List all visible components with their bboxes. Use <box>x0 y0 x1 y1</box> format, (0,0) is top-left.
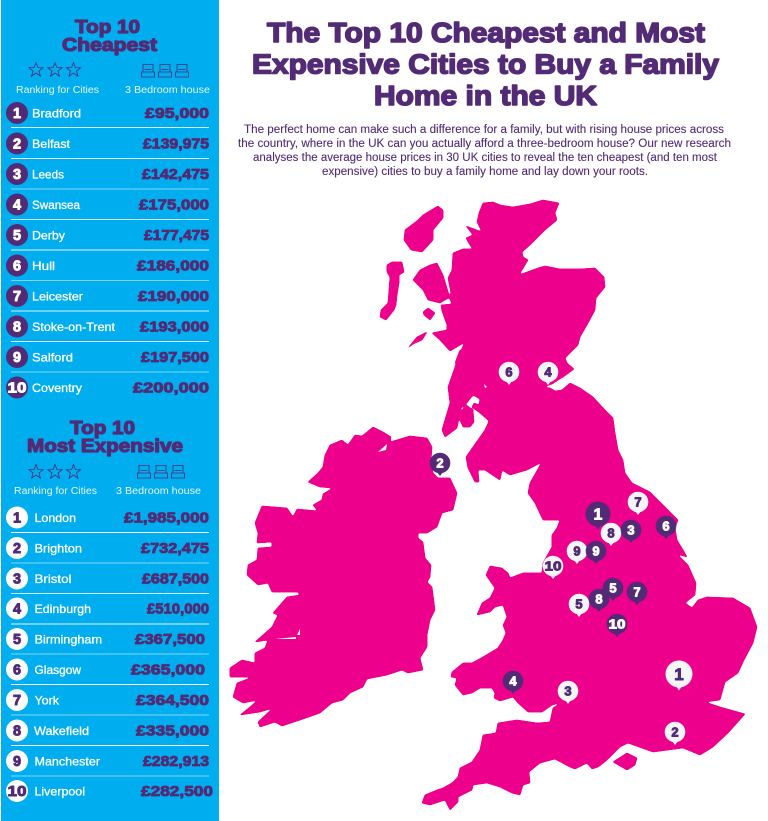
row: Glasgow: 6 <box>13 662 21 678</box>
pin: dark 5 Derby <box>603 578 623 601</box>
row: Leicester: Leicester <box>32 290 83 304</box>
pin: dark 4 Swansea: 4 <box>509 674 517 689</box>
row: Leicester <box>6 285 209 307</box>
row: Brighton: 2 <box>13 541 21 557</box>
column label: ranking for cities: Ranking for Cities <box>14 486 97 497</box>
row: Glasgow: Glasgow <box>34 663 81 677</box>
row: Leeds: £142,475 <box>142 167 209 183</box>
row: Edinburgh: Edinburgh <box>34 602 91 616</box>
row: York <box>6 689 209 711</box>
map land: Ireland <box>230 427 457 727</box>
pin: white 2 Brighton: 2 <box>671 725 679 740</box>
row: Edinburgh <box>6 598 209 620</box>
pin: white 8 Wakefield <box>601 523 621 546</box>
title: The Top 10 Cheapest and Most <box>267 17 705 48</box>
pin: white 4 Edinburgh: 4 <box>544 365 552 380</box>
row: Salford <box>6 346 209 368</box>
row: Bradford: £95,000 <box>145 106 209 122</box>
row: York: £364,500 <box>136 693 209 709</box>
pin: white 10 Liverpool <box>543 556 563 579</box>
panel: sidebar rankings <box>1 0 219 821</box>
row: Salford: 9 <box>13 350 21 366</box>
icon: three stars <box>29 62 81 76</box>
row: Belfast <box>6 132 209 154</box>
row: Birmingham: 5 <box>13 632 21 648</box>
intro text <box>238 124 731 178</box>
row: Coventry: £200,000 <box>133 380 209 396</box>
column label: 3 bedroom house: 3 Bedroom house <box>125 85 210 96</box>
pin: dark 9 Salford: 9 <box>592 544 600 559</box>
map detail: sea lochs <box>275 384 487 639</box>
row: Bradford <box>6 102 209 124</box>
row: Coventry: 10 <box>8 381 26 397</box>
row: Leeds <box>6 163 209 185</box>
title: Home in the UK <box>374 80 597 111</box>
row: Derby: Derby <box>32 229 65 243</box>
pin: dark 9 Salford <box>586 541 606 564</box>
pin: white 7 York: 7 <box>634 495 642 510</box>
row: Birmingham <box>6 628 205 650</box>
row: Hull <box>6 254 209 276</box>
pin: dark 4 Swansea <box>503 671 523 694</box>
row: Belfast: Belfast <box>32 137 71 151</box>
row: Hull: £186,000 <box>137 258 209 274</box>
row: Swansea: £175,000 <box>139 198 209 214</box>
row: Stoke-on-Trent: 8 <box>13 320 21 336</box>
pin: white 6 Glasgow <box>499 362 519 385</box>
icon: three beds <box>142 64 188 77</box>
heading: top 10 cheapest: Top 10 <box>75 17 140 37</box>
row: Belfast: £139,975 <box>143 136 209 152</box>
icon: three beds <box>138 466 184 478</box>
heading: top 10 cheapest <box>62 17 157 55</box>
row: Glasgow: £365,000 <box>131 662 205 678</box>
title: Expensive Cities to Buy a Family <box>252 48 719 80</box>
row: Coventry <box>6 376 209 398</box>
intro text: analyses the average house prices in 30 UK cities to reveal the ten cheapest (and ten most <box>253 152 718 164</box>
row: Bristol: £687,500 <box>142 572 209 588</box>
intro text: The perfect home can make such a difference for a family, but with rising house prices across <box>244 124 724 136</box>
row: Birmingham: £367,500 <box>135 632 205 648</box>
row: Liverpool: £282,500 <box>141 784 213 800</box>
row: Bradford: 1 <box>13 106 21 122</box>
title <box>252 17 719 111</box>
row: Swansea: 4 <box>13 198 21 214</box>
row: Hull: 6 <box>13 259 21 275</box>
heading: top 10 cheapest: Cheapest <box>62 35 157 55</box>
pin: white 5 Birmingham <box>569 594 589 617</box>
row: Stoke-on-Trent: £193,000 <box>140 320 209 336</box>
pin: dark 5 Derby: 5 <box>609 581 617 596</box>
row: Edinburgh: 4 <box>13 602 21 618</box>
row: Swansea: Swansea <box>32 198 80 212</box>
row: Swansea <box>6 194 209 216</box>
pin: dark 2 Belfast <box>430 453 450 476</box>
row: Wakefield: £335,000 <box>136 724 209 740</box>
pin: white 9 Manchester <box>567 541 587 564</box>
pin: dark 3 Leeds: 3 <box>627 523 635 538</box>
row: Wakefield <box>6 720 209 742</box>
row: Bristol <box>6 568 209 590</box>
intro text: the country, where in the UK can you actually afford a three-bedroom house? Our new research <box>238 138 731 150</box>
row: Birmingham: Birmingham <box>34 632 102 646</box>
row: Bristol: 3 <box>13 572 21 588</box>
row: London: £1,985,000 <box>124 510 209 526</box>
row: Bradford: Bradford <box>32 107 81 121</box>
pin: white 6 Glasgow: 6 <box>505 365 513 380</box>
row: Manchester: 9 <box>13 754 21 770</box>
row: Coventry: Coventry <box>32 381 82 395</box>
pin: dark 7 Leicester: 7 <box>633 585 641 600</box>
row: Leicester: 7 <box>13 289 21 305</box>
column label: ranking for cities: Ranking for Cities <box>16 85 99 96</box>
pin: white 4 Edinburgh <box>538 362 558 385</box>
pin: white 7 York <box>628 492 648 515</box>
intro text: expensive) cities to buy a family home and lay down your roots. <box>322 166 648 178</box>
row: Brighton: £732,475 <box>141 541 209 557</box>
pin: dark 6 Hull <box>656 516 676 539</box>
row: Salford: Salford <box>32 351 73 365</box>
pin: white 5 Birmingham: 5 <box>575 597 583 612</box>
row: Liverpool <box>6 780 213 802</box>
row: Derby: 5 <box>13 228 21 244</box>
row: Leicester: £190,000 <box>138 289 209 305</box>
row: London: 1 <box>13 510 21 526</box>
row: Brighton: Brighton <box>34 542 82 556</box>
pin: dark 10 Coventry: 10 <box>608 617 626 632</box>
pin: white 9 Manchester: 9 <box>573 544 581 559</box>
row: Manchester: £282,913 <box>143 754 209 770</box>
row: Liverpool: 10 <box>8 784 26 800</box>
pin: white 3 Bristol <box>558 681 578 704</box>
pin: dark 10 Coventry <box>607 614 627 637</box>
pin: dark 2 Belfast: 2 <box>436 456 444 471</box>
pin: white 3 Bristol: 3 <box>564 684 572 699</box>
row: Leeds: 3 <box>13 167 21 183</box>
row: Brighton <box>6 537 209 559</box>
pin: dark 3 Leeds <box>621 520 641 543</box>
row: York: 7 <box>13 693 21 709</box>
row: Leeds: Leeds <box>32 168 64 182</box>
dividers cheapest <box>11 128 209 372</box>
row: Derby: £177,475 <box>144 228 209 244</box>
pin: dark 8 Stoke-on-Trent: 8 <box>595 592 603 607</box>
row: Liverpool: Liverpool <box>34 784 85 798</box>
column label: 3 bedroom house: 3 Bedroom house <box>116 486 201 497</box>
map of the UK and Ireland <box>230 200 757 810</box>
row: Wakefield: 8 <box>13 724 21 740</box>
pin: dark 8 Stoke-on-Trent <box>589 589 609 612</box>
row: Derby <box>6 224 209 246</box>
row: London: London <box>34 511 76 525</box>
row: Salford: £197,500 <box>141 350 209 366</box>
dividers most expensive <box>11 532 209 776</box>
map land: Great Britain and islands <box>380 200 757 810</box>
row: Stoke-on-Trent <box>6 316 209 338</box>
row: Stoke-on-Trent: Stoke-on-Trent <box>32 320 116 334</box>
row: Bristol: Bristol <box>34 572 72 586</box>
row: Manchester <box>6 750 209 772</box>
heading: top 10 most expensive: Most Expensive <box>27 436 183 456</box>
pin: white 1 London <box>666 660 692 690</box>
row: Glasgow <box>6 658 205 680</box>
row: York: York <box>34 694 60 708</box>
pin: white 8 Wakefield: 8 <box>607 526 615 541</box>
pin: white 10 Liverpool: 10 <box>544 559 562 574</box>
pin: white 2 Brighton <box>665 722 685 745</box>
row: London <box>6 506 209 528</box>
pin: dark 1 Bradford <box>586 502 610 530</box>
row: Manchester: Manchester <box>34 754 100 768</box>
row: Belfast: 2 <box>13 137 21 153</box>
heading: top 10 most expensive: Top 10 <box>70 418 135 438</box>
pin: white 1 London: 1 <box>674 665 684 684</box>
heading: top 10 most expensive <box>27 418 183 456</box>
row: Hull: Hull <box>32 259 55 273</box>
icon: three stars <box>29 464 81 478</box>
pin: dark 7 Leicester <box>627 582 647 605</box>
pin: dark 1 Bradford: 1 <box>594 506 603 524</box>
row: Edinburgh: £510,000 <box>147 602 209 618</box>
row: Wakefield: Wakefield <box>34 724 89 738</box>
pin: dark 6 Hull: 6 <box>662 519 670 534</box>
